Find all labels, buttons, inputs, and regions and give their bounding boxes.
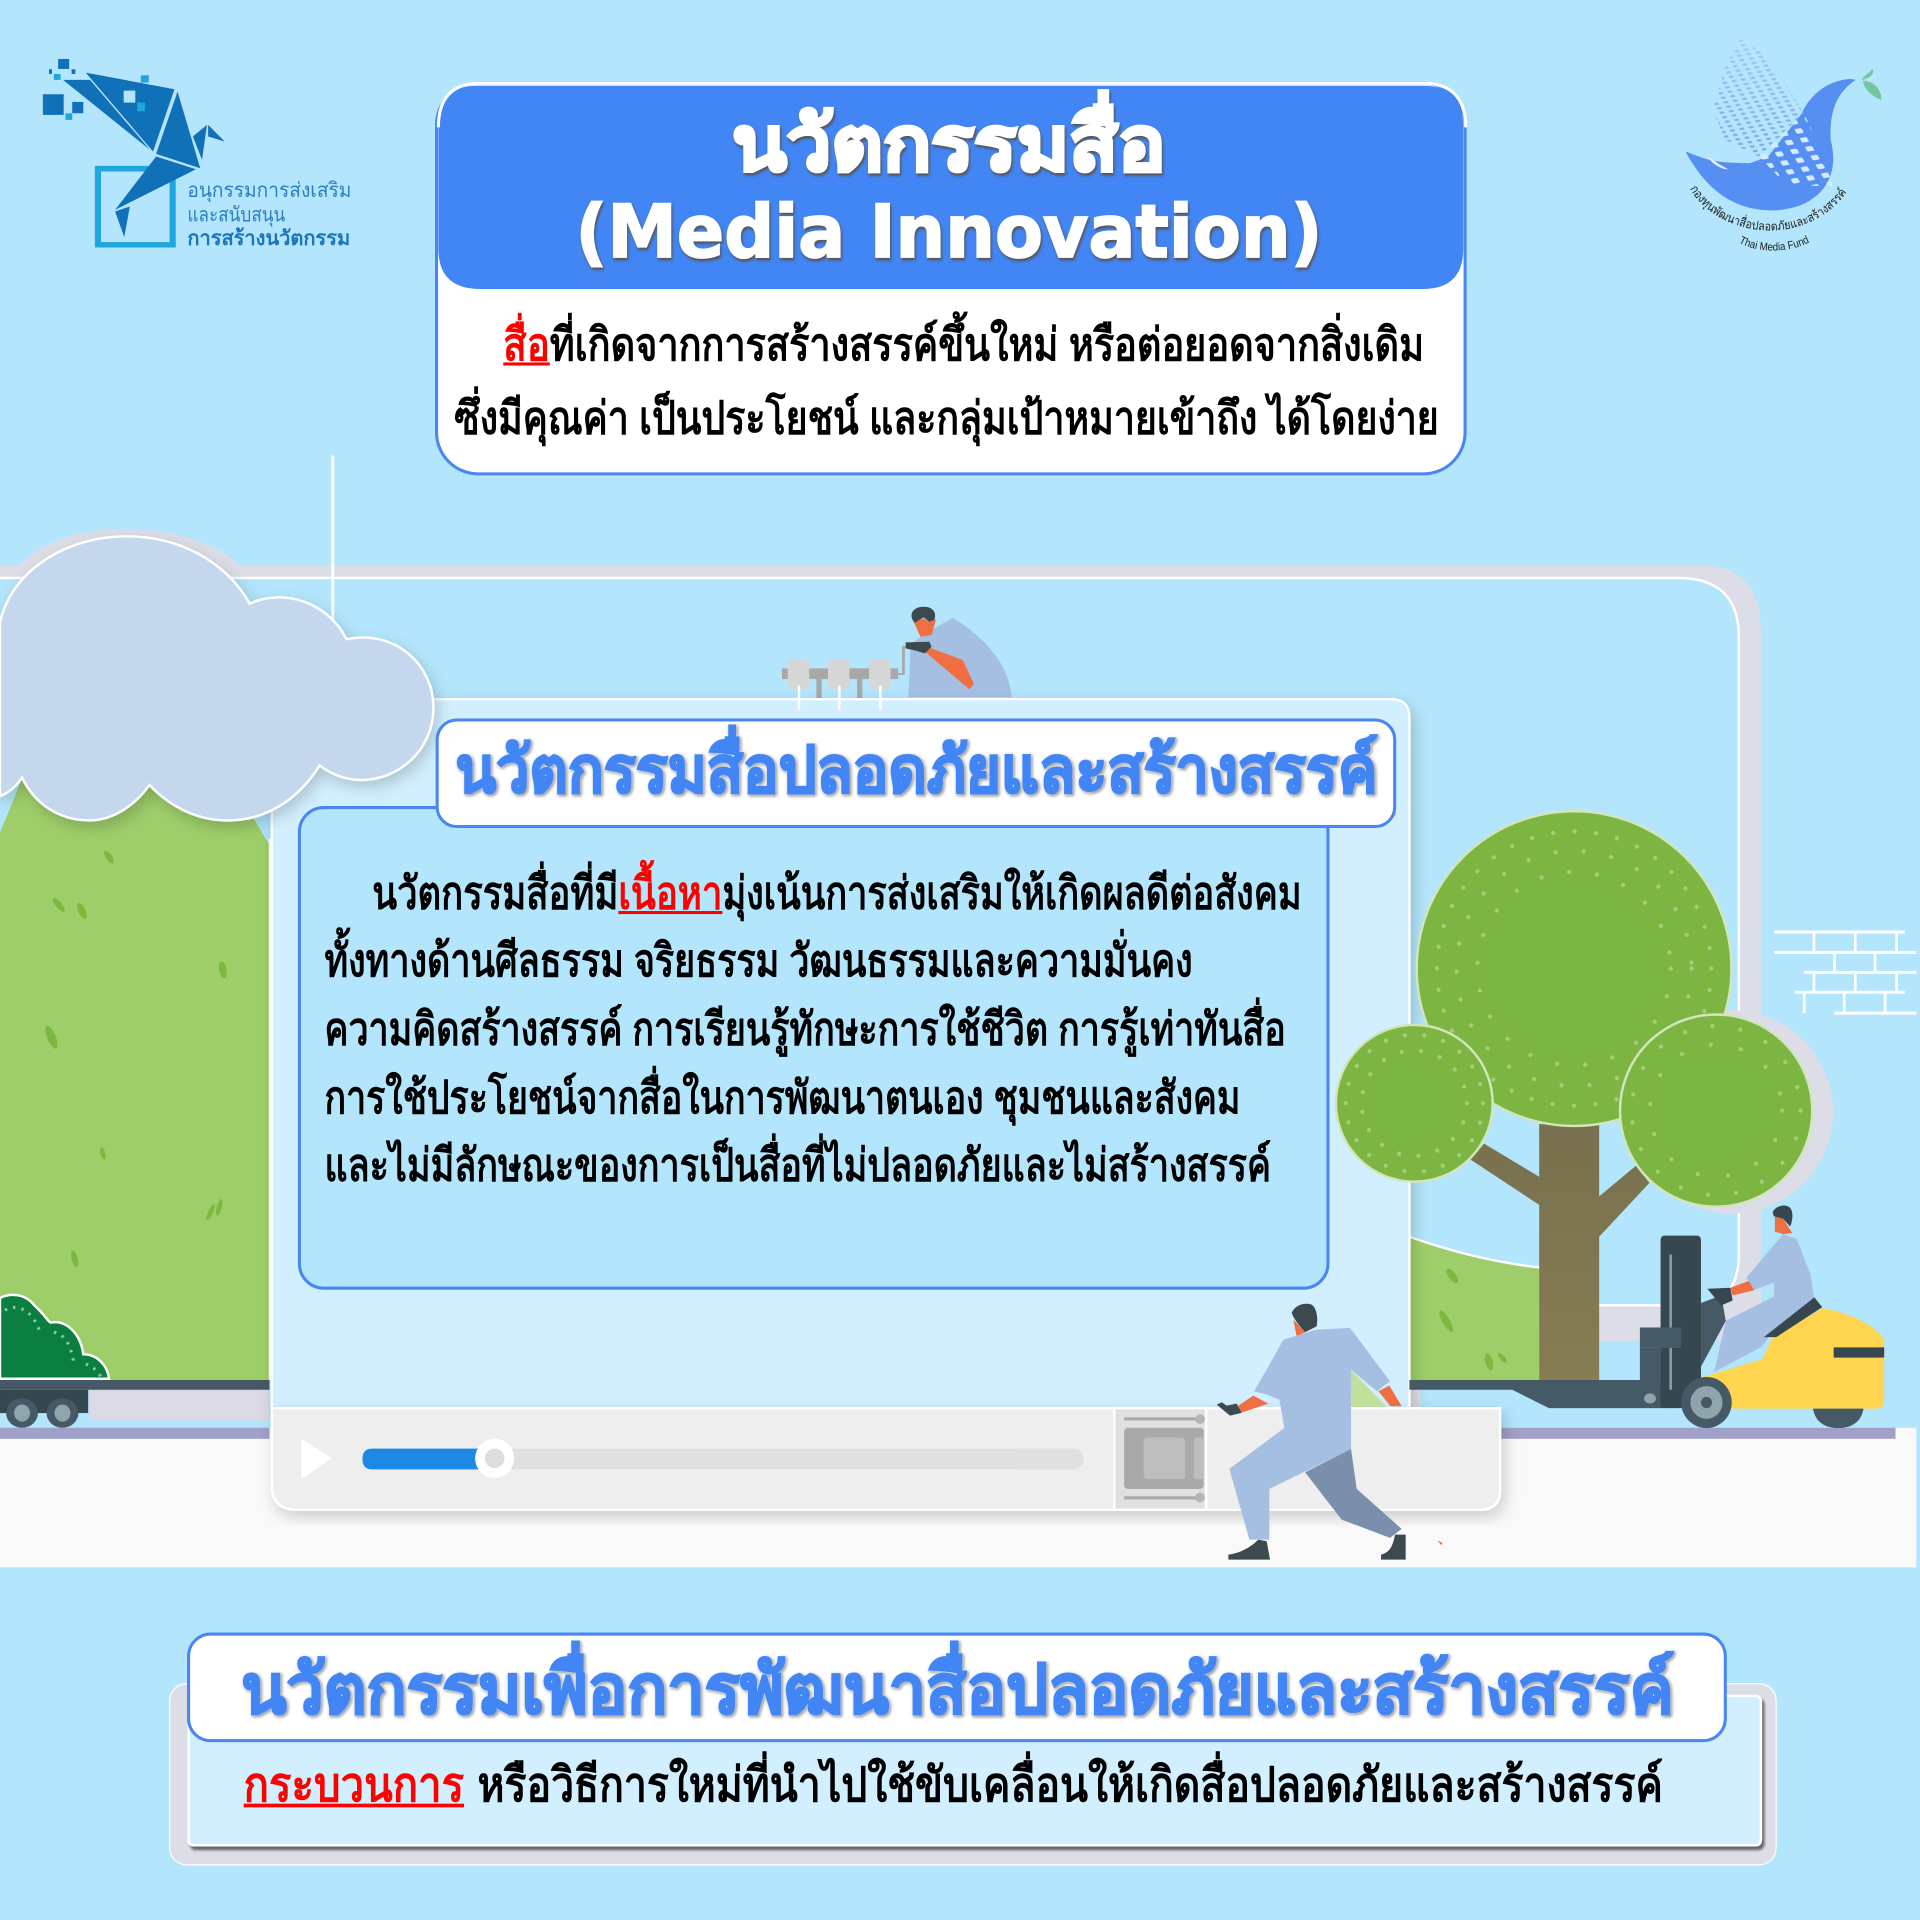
- roller stands crossing panel edge: [798, 686, 882, 710]
- roller machine: [782, 647, 911, 698]
- grey backing: [170, 1684, 1776, 1865]
- body slot: [1834, 1347, 1884, 1358]
- leaves on right hill: [1437, 1267, 1508, 1371]
- device frame: [0, 566, 1761, 1408]
- tree: [1336, 811, 1833, 1380]
- card body: [437, 83, 1465, 474]
- arms: [1238, 1386, 1402, 1413]
- body paragraph: นวัตกรรมสื่อที่มี: [372, 862, 618, 919]
- body paragraph: ความคิดสร้างสรรค์ การเรียนรู้ทักษะการใช้ชีวิต การรู้เท่าทันสื่อ: [324, 997, 1286, 1057]
- right crown: [1620, 1014, 1812, 1207]
- body paragraph: และไม่มีลักษณะของการเป็นสื่อที่ไม่ปลอดภัยและไม่สร้างสรรค์: [324, 1133, 1271, 1190]
- bush: [0, 1295, 109, 1379]
- light green behind arm: [1351, 1370, 1387, 1407]
- body paragraph: ทั้งทางด้านศีลธรรม จริยธรรม วัฒนธรรมและความมั่นคง: [324, 927, 1193, 986]
- neck: [1293, 1320, 1305, 1337]
- definition paragraph: ที่เกิดจากการสร้างสรรค์ขึ้นใหม่ หรือต่อยอดจากสิ่งเดิม: [550, 311, 1424, 370]
- left logo: innovation subcommittee: [43, 59, 351, 250]
- bottom panel: [170, 1634, 1776, 1865]
- back leg: [1305, 1449, 1402, 1538]
- process description: [244, 1751, 1663, 1812]
- right logo: Thai Media Fund: กองทุนพัฒนาสื่อปลอดภัยและสร้างสรรค์: [1690, 186, 1846, 231]
- leaves on left hill: [43, 849, 228, 1268]
- title line 2: (Media Innovation): [576, 190, 1322, 275]
- forklift fork base: [1409, 1380, 1665, 1408]
- thumbnail: [1114, 1408, 1206, 1510]
- progress track: [362, 1449, 1084, 1469]
- left logo: innovation subcommittee: และสนับสนุน: [187, 204, 285, 228]
- ground: [0, 1428, 1916, 1567]
- body paragraph: [324, 860, 1302, 1190]
- left hill: [0, 779, 271, 1380]
- logo text: อนุกรรมการส่งเสริม: [187, 179, 351, 203]
- keyword: content: เนื้อหา: [618, 860, 722, 919]
- left logo: innovation subcommittee: การสร้างนวัตกรรม: [187, 226, 350, 250]
- main panel: [272, 699, 1409, 1408]
- body paragraph: การใช้ประโยชน์จากสื่อในการพัฒนาตนเอง ชุมชนและสังคม: [324, 1066, 1240, 1126]
- progress fill: [362, 1449, 480, 1469]
- hair: [1292, 1304, 1317, 1332]
- left crown: [1336, 1025, 1493, 1182]
- forklift with rider: [1640, 1205, 1884, 1428]
- torso and front leg: [1229, 1328, 1390, 1540]
- truck: [0, 1380, 269, 1428]
- process description: หรือวิธีการใหม่ที่นำไปใช้ขับเคลื่อนให้เกิดสื่อปลอดภัยและสร้างสรรค์: [478, 1751, 1663, 1812]
- rider: [1707, 1205, 1814, 1372]
- play icon: [301, 1439, 332, 1479]
- progress knob: [475, 1439, 514, 1478]
- content box: [299, 808, 1328, 1288]
- title card: [437, 83, 1466, 474]
- grey lobe behind tree: [1630, 1010, 1833, 1213]
- heading text: นวัตกรรมเพื่อการพัฒนาสื่อปลอดภัยและสร้างสรรค์: [241, 1641, 1674, 1728]
- curved fund name: [1690, 179, 1855, 231]
- curved English name: [1739, 241, 1811, 251]
- keyword: media: สื่อ: [503, 313, 550, 370]
- small orange mark: [1438, 1540, 1442, 1545]
- keyword: process: กระบวนการ: [244, 1759, 464, 1812]
- standing worker: [1217, 1304, 1406, 1560]
- glove: [1217, 1402, 1242, 1416]
- seat back: [1701, 1295, 1726, 1367]
- brick wall: [1774, 932, 1916, 1013]
- light blue card: [189, 1696, 1761, 1845]
- cloud backing: [18, 529, 240, 566]
- antenna line: [331, 456, 334, 627]
- machine and worker on top of panel: [782, 607, 1011, 698]
- origami bird: [43, 59, 225, 247]
- purple floor lines: [0, 1428, 1896, 1439]
- right small hill: [1409, 1237, 1539, 1380]
- right logo: Thai Media Fund: Thai Media Fund: [1740, 235, 1809, 251]
- dove: [1686, 38, 1881, 210]
- shoes: [1228, 1535, 1406, 1560]
- cloud: [0, 536, 433, 820]
- heading text: นวัตกรรมสื่อปลอดภัยและสร้างสรรค์: [456, 725, 1378, 806]
- heading box: safe and creative media innovation: [437, 720, 1395, 827]
- right logo: Thai Media Fund: [1686, 40, 1882, 251]
- definition paragraph: [454, 311, 1439, 446]
- definition paragraph: ซึ่งมีคุณค่า เป็นประโยชน์ และกลุ่มเป้าหมายเข้าถึง ได้โดยง่าย: [454, 386, 1439, 446]
- big crown: [1417, 811, 1731, 1126]
- white top edge: [438, 83, 1466, 127]
- illustrated scene: [0, 456, 1916, 1567]
- video player bar: [272, 1408, 1500, 1510]
- title line 1: นวัตกรรมสื่อ: [732, 90, 1166, 187]
- mast: [1640, 1236, 1701, 1408]
- front wheel: [1681, 1377, 1732, 1428]
- title banner: [438, 86, 1463, 289]
- body paragraph: มุ่งเน้นการส่งเสริมให้เกิดผลดีต่อสังคม: [722, 867, 1302, 922]
- heading box: [189, 1634, 1725, 1741]
- yellow body: [1703, 1308, 1884, 1409]
- rear wheel: [1813, 1409, 1864, 1428]
- trunk and branches: [1471, 1124, 1649, 1380]
- seat strip: [1764, 1297, 1822, 1337]
- seated worker: [906, 607, 1011, 697]
